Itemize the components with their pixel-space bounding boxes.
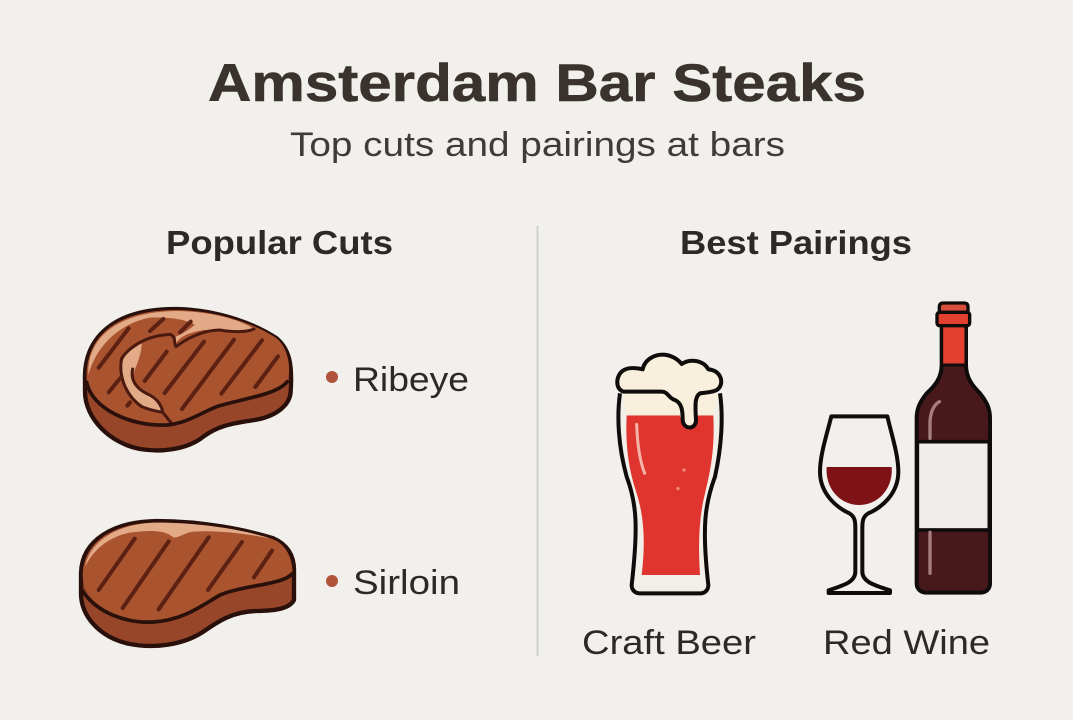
- icon: wine glass: [820, 416, 898, 593]
- label: red wine: Red Wine: [823, 624, 990, 662]
- icon: wine bottle: [917, 303, 990, 593]
- heading: popular cuts: Popular Cuts: [166, 224, 393, 261]
- subtitle: Top cuts and pairings at bars: [290, 126, 785, 164]
- label: ribeye: Ribeye: [353, 361, 469, 399]
- heading: best pairings: Best Pairings: [680, 224, 912, 261]
- label: craft beer: Craft Beer: [582, 624, 756, 662]
- bullet: sirloin: [326, 575, 338, 587]
- icon: ribeye steak: [85, 309, 291, 450]
- icon: sirloin steak: [81, 521, 294, 646]
- bullet: ribeye: [326, 371, 338, 383]
- label: sirloin: Sirloin: [353, 564, 460, 602]
- title: Amsterdam Bar Steaks: [208, 54, 866, 113]
- icon: craft beer glass: [617, 355, 722, 593]
